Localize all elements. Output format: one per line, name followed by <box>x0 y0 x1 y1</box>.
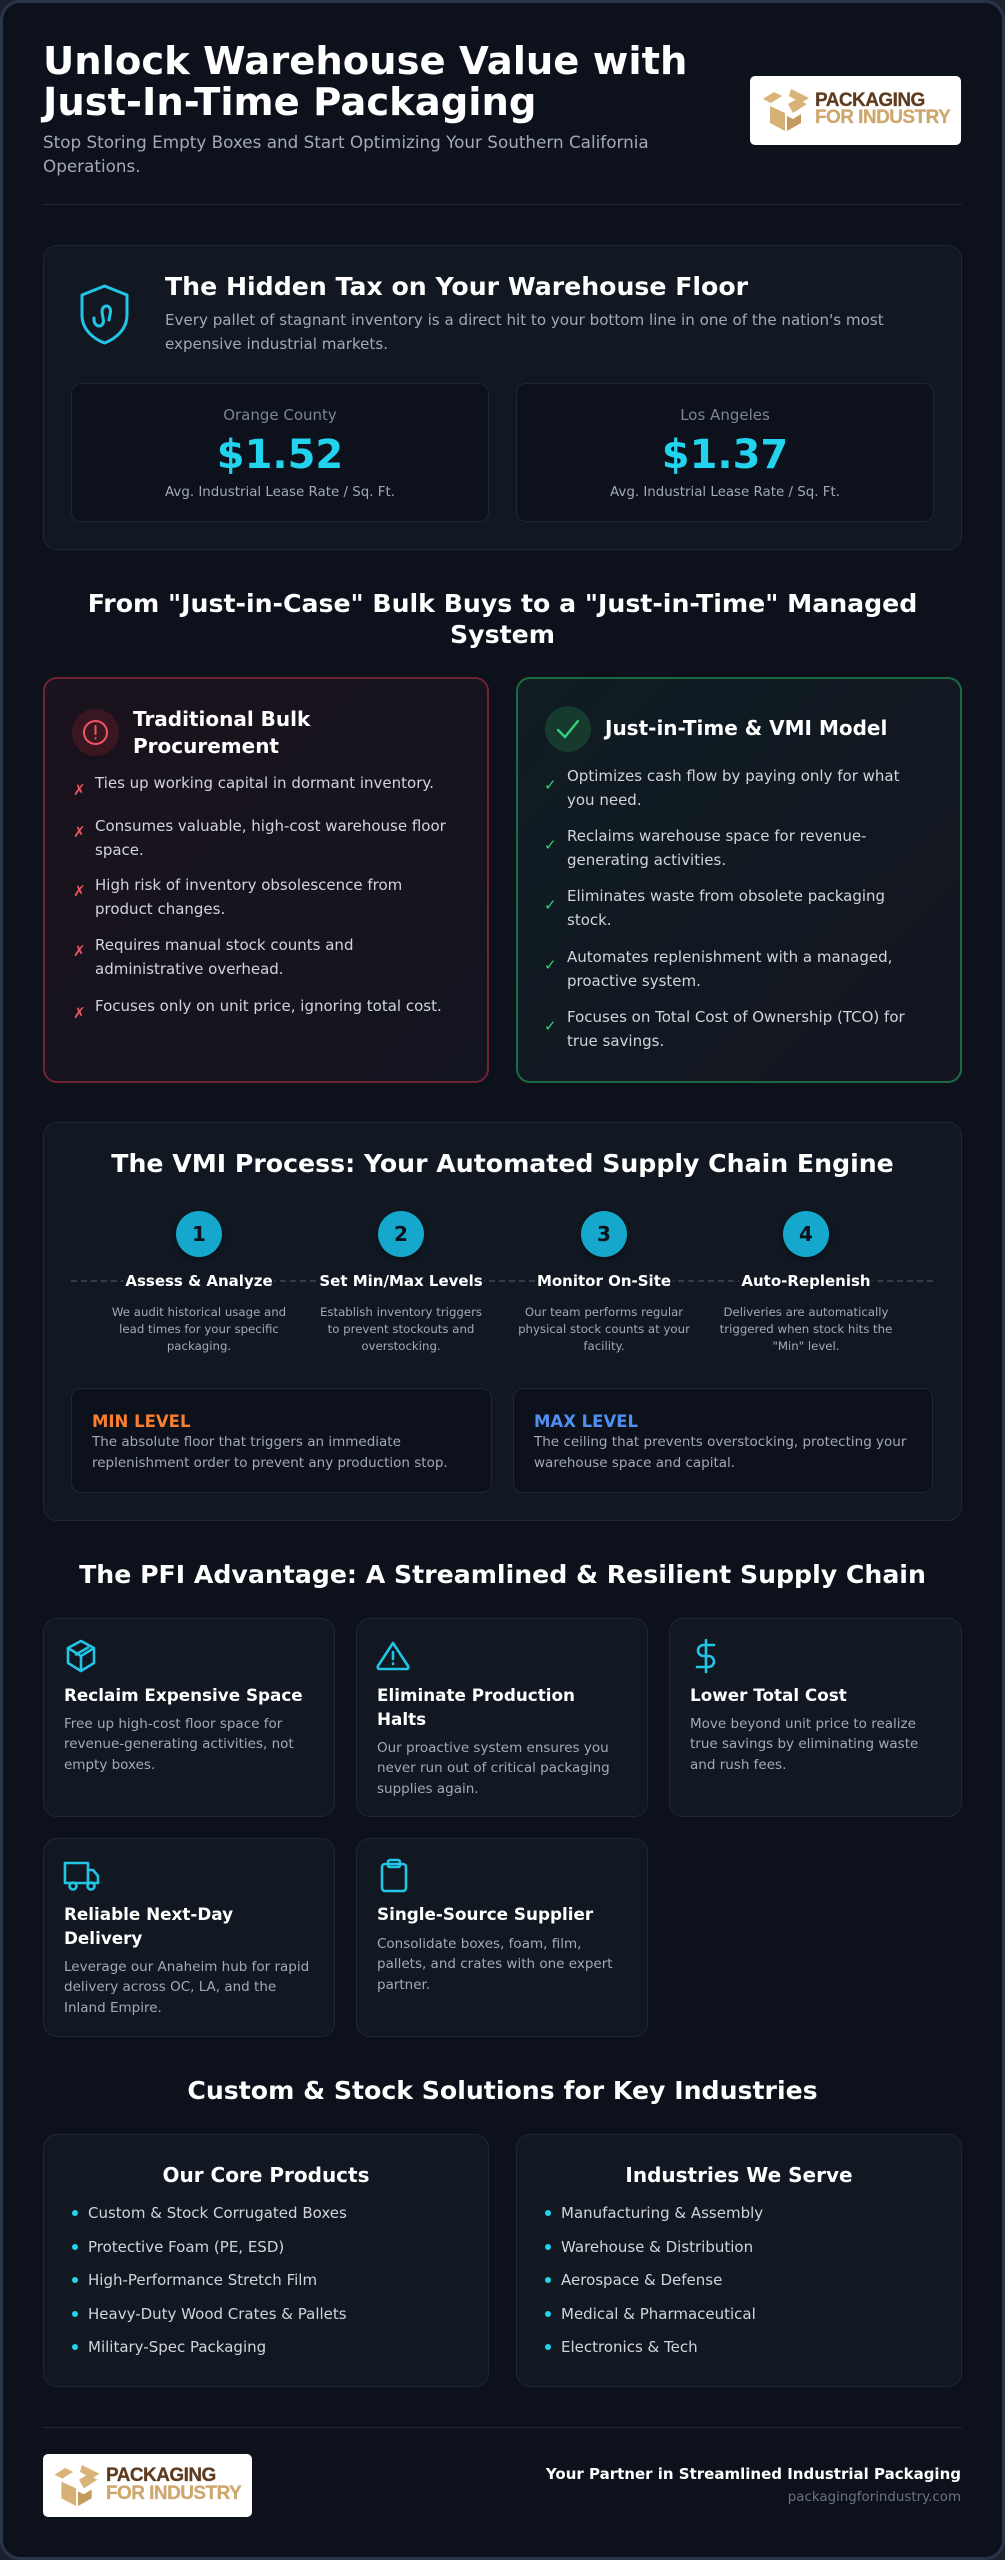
step text: lead times for your specific <box>119 1322 279 1336</box>
icon: check circle <box>545 706 591 752</box>
card heading: Just-in-Time & VMI Model <box>605 716 887 740</box>
icon: shield <box>80 284 128 344</box>
list: industries <box>545 2204 763 2356</box>
panel heading: Our Core Products <box>162 2163 370 2187</box>
text: hidden tax description <box>165 311 884 353</box>
icon: warning circle <box>72 709 119 756</box>
card heading: Traditional Bulk <box>133 707 310 731</box>
logo wordmark <box>106 2465 242 2504</box>
callout label: MAX LEVEL <box>534 1412 638 1431</box>
card text: Consolidate boxes, foam, film, <box>377 1936 581 1952</box>
step number <box>581 1211 627 1257</box>
panel: core products <box>43 2134 489 2387</box>
list: benefits: ✓ <box>544 956 557 974</box>
card text: supplies again. <box>377 1781 479 1797</box>
list: benefits: Optimizes cash flow by paying only for what <box>567 767 900 785</box>
footer tagline: Your Partner in Streamlined Industrial Packaging <box>546 2465 961 2483</box>
step text: facility. <box>583 1339 625 1353</box>
list: drawbacks: ✗ <box>73 882 86 900</box>
card heading: Procurement <box>133 734 279 758</box>
panel: hidden tax <box>43 245 962 550</box>
icon: cube <box>66 1640 96 1672</box>
heading: custom and stock solutions: Custom & Stock Solutions for Key Industries <box>187 2076 818 2105</box>
list: products <box>72 2204 347 2356</box>
step title: Monitor On-Site <box>537 1272 671 1290</box>
step 2 <box>319 1211 484 1353</box>
heading: PFI advantage: The PFI Advantage: A Streamlined & Resilient Supply Chain <box>79 1560 926 1589</box>
card text: pallets, and crates with one expert <box>377 1956 613 1972</box>
callout: min level <box>71 1388 492 1493</box>
stat caption: Avg. Industrial Lease Rate / Sq. Ft. <box>165 485 395 500</box>
card text: true savings by eliminating waste <box>690 1736 918 1752</box>
card title: Reclaim Expensive Space <box>64 1685 303 1705</box>
card text: revenue-generating activities, not <box>64 1736 294 1752</box>
step 4 <box>720 1211 892 1353</box>
stat card: Los Angeles <box>516 383 934 522</box>
card title: Halts <box>377 1708 426 1728</box>
card text: Move beyond unit price to realize <box>690 1716 916 1732</box>
heading: VMI process: The VMI Process: Your Automated Supply Chain Engine <box>111 1149 894 1178</box>
logo wordmark: FOR INDUSTRY <box>106 2483 241 2504</box>
card text <box>64 1716 294 1773</box>
list: drawbacks: Focuses only on unit price, ignoring total cost. <box>95 997 442 1015</box>
list: drawbacks: Consumes valuable, high-cost warehouse floor <box>95 817 446 835</box>
callout text <box>92 1434 448 1470</box>
text: hidden tax description: Every pallet of stagnant inventory is a direct hit to your bottom line in one of the nation's most <box>165 311 884 329</box>
list: drawbacks: Requires manual stock counts and <box>95 936 353 954</box>
step text <box>518 1305 690 1353</box>
card title <box>377 1685 575 1728</box>
icon: open box <box>763 89 809 131</box>
list: benefits: ✓ <box>544 776 557 794</box>
list: products: Protective Foam (PE, ESD) <box>88 2238 284 2256</box>
card title <box>64 1904 233 1948</box>
step 3 <box>518 1211 690 1353</box>
subtitle: Operations. <box>43 156 141 176</box>
list: drawbacks: High risk of inventory obsolescence from <box>95 876 402 894</box>
card text: empty boxes. <box>64 1757 155 1773</box>
stat card: Orange County <box>71 383 489 522</box>
callout text <box>534 1434 906 1470</box>
list: drawbacks: ✗ <box>73 1004 86 1022</box>
logo wordmark <box>815 90 951 128</box>
step number <box>176 1211 222 1257</box>
title: Unlock Warehouse Value with <box>43 39 687 84</box>
stat label: Los Angeles <box>680 406 770 424</box>
card title: Single-Source Supplier <box>377 1904 593 1924</box>
subtitle: Stop Storing Empty Boxes and Start Optimizing Your Southern California <box>43 132 649 152</box>
list: industries: Medical & Pharmaceutical <box>561 2305 756 2323</box>
list: products: Custom & Stock Corrugated Boxes <box>88 2204 347 2222</box>
list: industries: Aerospace & Defense <box>561 2271 722 2289</box>
step text <box>320 1305 482 1353</box>
card text: partner. <box>377 1977 430 1993</box>
text: hidden tax description: expensive industrial markets. <box>165 335 388 353</box>
list: drawbacks: space. <box>95 841 144 859</box>
subtitle <box>43 132 649 176</box>
title <box>40 39 687 125</box>
card: single-source supplier <box>356 1838 648 2037</box>
icon: warning triangle <box>376 1642 410 1670</box>
step text: Deliveries are automatically <box>723 1305 888 1319</box>
step title: Set Min/Max Levels <box>319 1272 483 1290</box>
card text: never run out of critical packaging <box>377 1760 610 1776</box>
panel: industries served <box>516 2134 962 2387</box>
list: benefits: Automates replenishment with a managed, <box>567 948 892 966</box>
card: eliminate production halts <box>356 1618 648 1817</box>
step text: to prevent stockouts and <box>328 1322 474 1336</box>
list: drawbacks: ✗ <box>73 781 86 799</box>
list: drawbacks: product changes. <box>95 900 225 918</box>
card text: delivery across OC, LA, and the <box>64 1979 276 1995</box>
icon: clipboard <box>380 1858 408 1892</box>
stat caption: Avg. Industrial Lease Rate / Sq. Ft. <box>610 485 840 500</box>
list: products: Military-Spec Packaging <box>88 2338 266 2356</box>
callout text: replenishment order to prevent any production stop. <box>92 1454 448 1470</box>
heading: just in case vs just in time <box>88 589 917 649</box>
card heading <box>133 707 311 758</box>
card text <box>690 1716 918 1773</box>
step text <box>112 1305 286 1353</box>
logo wordmark: FOR INDUSTRY <box>815 107 950 128</box>
step text: packaging. <box>167 1339 231 1353</box>
heading: hidden tax: The Hidden Tax on Your Warehouse Floor <box>165 272 748 301</box>
list: benefits: stock. <box>567 911 612 929</box>
callout: max level <box>513 1388 933 1493</box>
panel heading: Industries We Serve <box>625 2163 853 2187</box>
callout label: MIN LEVEL <box>92 1412 190 1431</box>
icon: open box <box>54 2465 100 2506</box>
card text: Leverage our Anaheim hub for rapid <box>64 1959 309 1975</box>
logo: Packaging For Industry header <box>750 76 961 145</box>
list: products: High-Performance Stretch Film <box>88 2271 317 2289</box>
logo wordmark: PACKAGING <box>815 90 925 111</box>
list: drawbacks: ✗ <box>73 942 86 960</box>
logo: Packaging For Industry footer <box>43 2454 252 2517</box>
list: benefits: Focuses on Total Cost of Ownership (TCO) for <box>567 1008 905 1026</box>
step text: Our team performs regular <box>525 1305 683 1319</box>
heading: just in case vs just in time: System <box>450 620 555 649</box>
step text <box>720 1305 892 1353</box>
step title: Auto-Replenish <box>741 1272 871 1290</box>
card: reliable next-day delivery <box>43 1838 335 2037</box>
step text: physical stock counts at your <box>518 1322 690 1336</box>
card title: Lower Total Cost <box>690 1685 847 1705</box>
list: industries: Warehouse & Distribution <box>561 2238 753 2256</box>
card text <box>377 1936 613 1993</box>
callout text: warehouse space and capital. <box>534 1454 735 1470</box>
list: benefits: ✓ <box>544 896 557 914</box>
step title: Assess & Analyze <box>125 1272 273 1290</box>
icon: dollar <box>696 1638 716 1674</box>
list: drawbacks: ✗ <box>73 823 86 841</box>
list: products: Heavy-Duty Wood Crates & Pallets <box>88 2305 347 2323</box>
list: benefits: generating activities. <box>567 851 726 869</box>
list: benefits: proactive system. <box>567 972 701 990</box>
step text: overstocking. <box>361 1339 441 1353</box>
step text: Establish inventory triggers <box>320 1305 482 1319</box>
step number <box>783 1211 829 1257</box>
callout text: The absolute floor that triggers an immediate <box>92 1434 401 1450</box>
card: reclaim expensive space <box>43 1618 335 1817</box>
step number: 4 <box>799 1222 813 1246</box>
list: benefits: true savings. <box>567 1032 664 1050</box>
stat value: $1.37 <box>662 432 788 478</box>
step number: 1 <box>192 1222 206 1246</box>
card text: and rush fees. <box>690 1757 786 1773</box>
list: benefits: you need. <box>567 791 642 809</box>
list: benefits <box>544 767 905 1050</box>
panel: traditional bulk procurement <box>43 677 489 1083</box>
card text: Our proactive system ensures you <box>377 1740 609 1756</box>
list: drawbacks: administrative overhead. <box>95 960 284 978</box>
step text: triggered when stock hits the <box>720 1322 892 1336</box>
card text: Free up high-cost floor space for <box>64 1716 282 1732</box>
title: Just-In-Time Packaging <box>43 80 536 125</box>
card title: Delivery <box>64 1928 142 1948</box>
list: benefits: Reclaims warehouse space for revenue- <box>567 827 866 845</box>
card text <box>377 1740 610 1797</box>
card text: Inland Empire. <box>64 2000 162 2016</box>
stat value: $1.52 <box>217 432 343 478</box>
step text: "Min" level. <box>772 1339 840 1353</box>
panel: just-in-time VMI model <box>516 677 962 1083</box>
list: benefits: ✓ <box>544 836 557 854</box>
heading: just in case vs just in time: From "Just-in-Case" Bulk Buys to a "Just-in-Time" Managed <box>88 589 917 618</box>
card title: Reliable Next-Day <box>64 1904 233 1924</box>
list: drawbacks: Ties up working capital in dormant inventory. <box>95 774 434 792</box>
step number: 3 <box>597 1222 611 1246</box>
step number: 2 <box>394 1222 408 1246</box>
list: industries: Manufacturing & Assembly <box>561 2204 763 2222</box>
card title: Eliminate Production <box>377 1685 575 1705</box>
stat label: Orange County <box>223 406 337 424</box>
icon: truck <box>64 1862 100 1891</box>
footer url: packagingforindustry.com <box>788 2490 961 2505</box>
step 1 <box>112 1211 286 1353</box>
list: drawbacks <box>73 774 446 1022</box>
callout text: The ceiling that prevents overstocking, protecting your <box>534 1434 906 1450</box>
card text <box>64 1959 309 2016</box>
step text: We audit historical usage and <box>112 1305 286 1319</box>
card: lower total cost <box>669 1618 962 1817</box>
panel: VMI process <box>43 1122 962 1521</box>
list: industries: Electronics & Tech <box>561 2338 698 2356</box>
list: benefits: ✓ <box>544 1017 557 1035</box>
list: benefits: Eliminates waste from obsolete packaging <box>567 887 885 905</box>
step number <box>378 1211 424 1257</box>
logo wordmark: PACKAGING <box>106 2465 216 2486</box>
